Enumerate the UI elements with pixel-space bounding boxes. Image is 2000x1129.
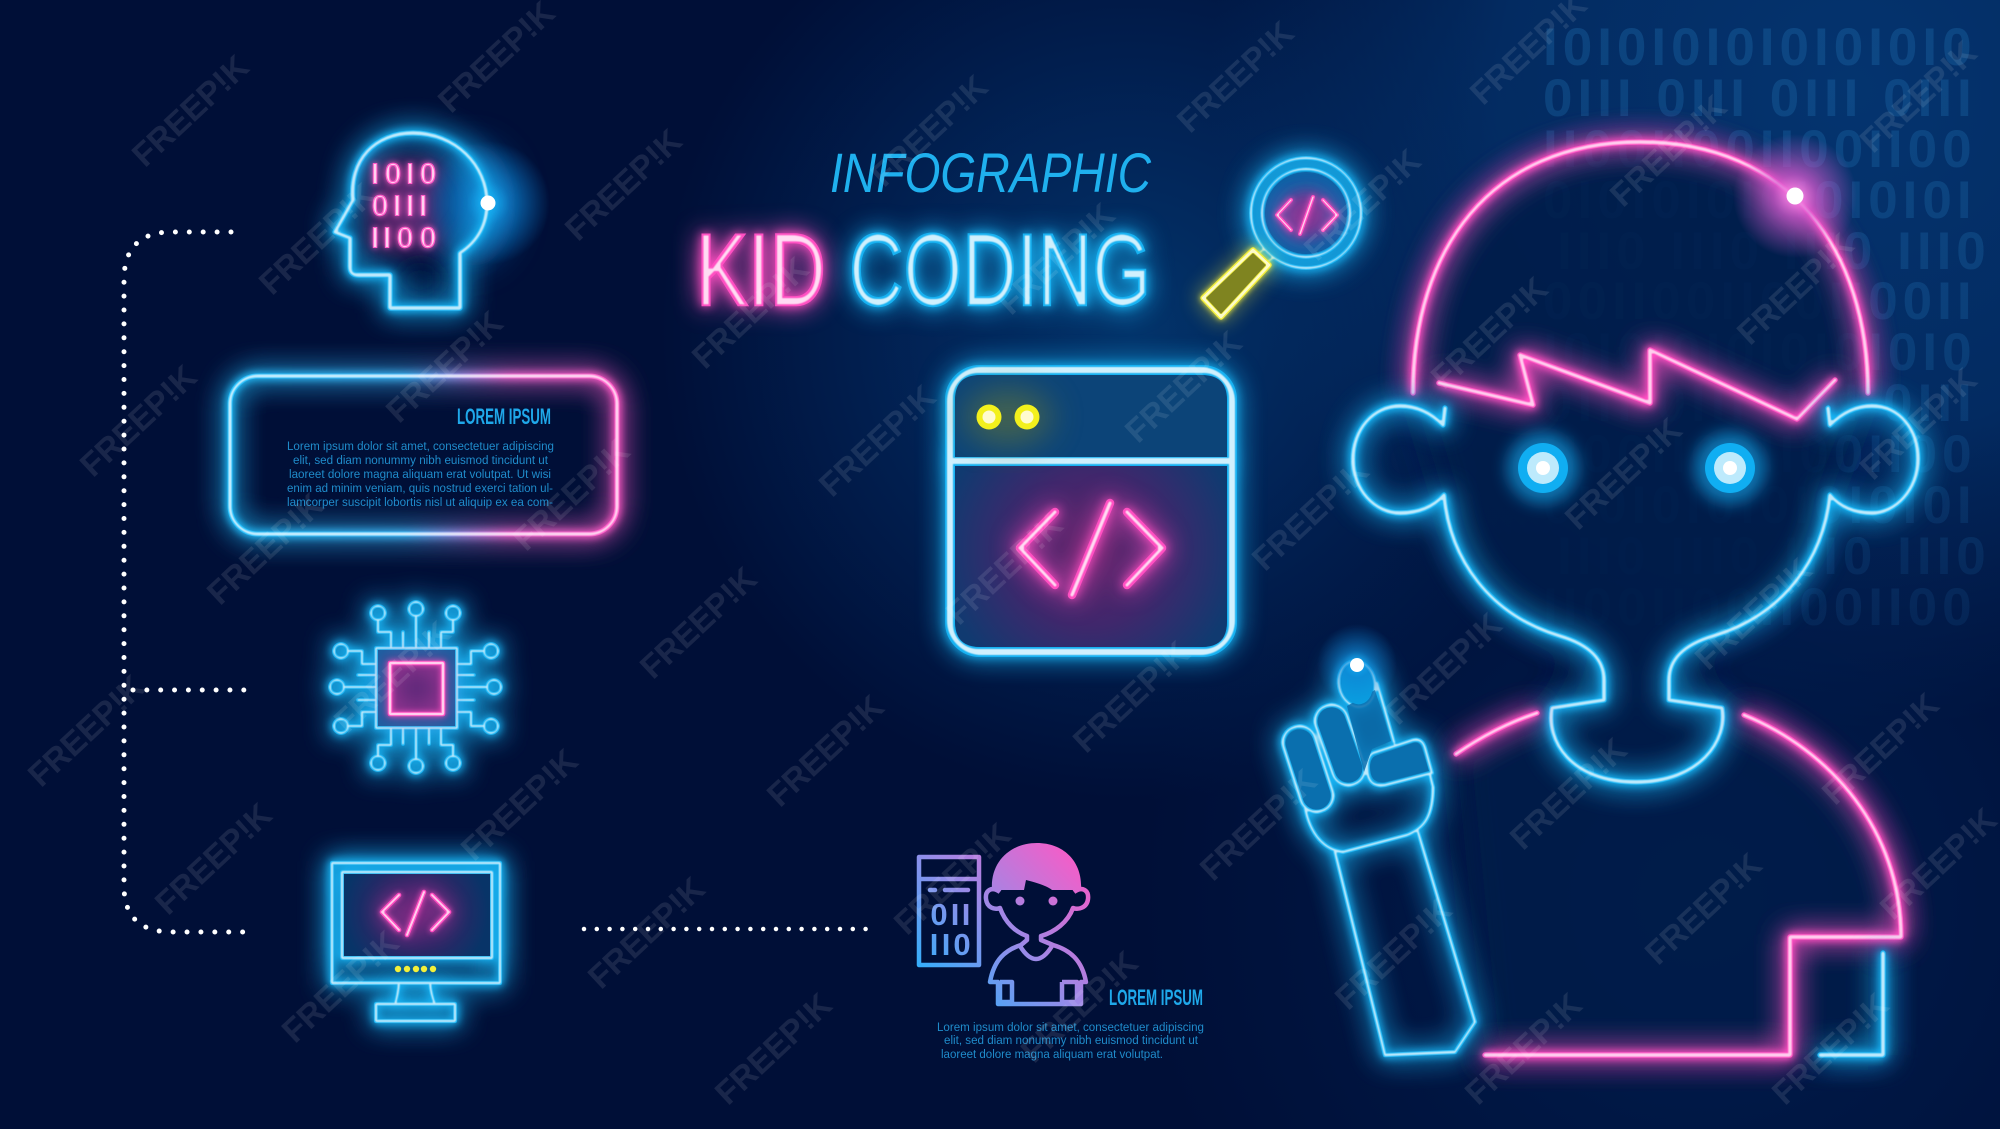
kid caption body: elit, sed diam nonummy nibh euismod tincidunt ut	[944, 1033, 1199, 1047]
watermark grid: FREEP!K	[148, 796, 279, 922]
icon: desktop monitor	[332, 863, 500, 1021]
watermark grid: FREEP!K	[581, 870, 712, 996]
kid caption heading: LOREM IPSUM	[1109, 985, 1203, 1010]
left shoulder	[1456, 713, 1537, 754]
watermark grid: FREEP!K	[864, 68, 995, 194]
watermark grid: FREEP!K	[1638, 846, 1769, 972]
watermark grid: FREEP!K	[1853, 34, 1984, 160]
watermark grid: FREEP!K	[73, 358, 204, 484]
panel body text: laoreet dolore magna aliquam erat volutpat. Ut wisi	[289, 467, 551, 481]
binary code background pattern: 0III 0III 0III 0III	[1543, 69, 1977, 128]
watermark grid: FREEP!K	[1170, 14, 1301, 140]
eye: left	[1507, 432, 1579, 504]
watermark grid: FREEP!K	[812, 378, 943, 504]
watermark grid: FREEP!K	[275, 924, 406, 1050]
panel body text: enim ad minim veniam, quis nostrud exerci tation ul-	[287, 481, 553, 495]
watermark grid: FREEP!K	[1118, 324, 1249, 450]
watermark grid: FREEP!K	[454, 742, 585, 868]
icon: head with binary: I0I0	[371, 156, 437, 191]
eye: right	[1694, 432, 1766, 504]
large kid figure	[1279, 134, 1918, 1055]
watermark grid: FREEP!K	[1245, 452, 1376, 578]
icon: microchip	[330, 602, 501, 773]
raised hand and arm	[1279, 624, 1475, 1055]
watermark grid: FREEP!K	[379, 304, 510, 430]
watermark grid: FREEP!K	[327, 614, 458, 740]
watermark grid: FREEP!K	[1328, 891, 1459, 1017]
watermark grid: FREEP!K	[252, 176, 383, 302]
icon: head with binary: 0III	[371, 188, 427, 223]
head and body dark silhouette	[1413, 142, 1901, 1055]
head outline	[1413, 142, 1868, 393]
watermark grid: FREEP!K	[991, 196, 1122, 322]
watermark grid: FREEP!K	[1014, 944, 1145, 1070]
watermark grid: FREEP!K	[1730, 226, 1861, 352]
panel heading: LOREM IPSUM	[457, 404, 551, 429]
binary code background pattern: I0I0I0I0I0I0I0I0	[1543, 18, 1977, 77]
watermark grid: FREEP!K	[200, 486, 331, 612]
watermark grid: FREEP!K	[708, 986, 839, 1112]
watermark grid: FREEP!K	[1815, 686, 1946, 812]
watermark grid: FREEP!K	[1424, 270, 1555, 396]
watermark grid: FREEP!K	[125, 48, 256, 174]
hair fringe	[1439, 350, 1835, 419]
kid caption body: laoreet dolore magna aliquam erat volutpat.	[941, 1047, 1163, 1061]
watermark grid: FREEP!K	[1503, 731, 1634, 857]
binary code background pattern: II00II00II00II00	[1543, 120, 1977, 179]
binary code background pattern: 00II00II00II00II	[1543, 272, 1977, 331]
watermark grid: FREEP!K	[558, 122, 689, 248]
dotted connector: to kid icon	[584, 927, 866, 931]
watermark grid: FREEP!K	[1603, 88, 1734, 214]
binary code background pattern	[1543, 18, 1991, 637]
watermark grid: FREEP!K	[1297, 142, 1428, 268]
icon: head with binary: II00	[371, 220, 437, 255]
watermark grid: FREEP!K	[1688, 551, 1819, 677]
dotted connector: left bracket	[124, 232, 244, 932]
icon: small kid with calculator: II0	[930, 927, 971, 962]
icon: magnifying glass	[1203, 158, 1361, 317]
binary code background pattern: II00II00II00II00	[1543, 425, 1977, 484]
binary code background pattern: I0I0I0I0I0I0I0I0	[1543, 323, 1977, 382]
right shoulder and torso	[1485, 715, 1901, 1055]
watermark grid: FREEP!K	[1193, 762, 1324, 888]
binary code background pattern: III0 III0 III0 III0	[1557, 222, 1991, 281]
title: kid: KID	[696, 213, 826, 327]
panel body text: lamcorper suscipit lobortis nisl ut aliquip ex ea com-	[287, 495, 553, 509]
icon: code window	[950, 370, 1232, 652]
watermark grid: FREEP!K	[21, 668, 152, 794]
watermark grid: FREEP!K	[1853, 361, 1984, 487]
watermark grid: FREEP!K	[1458, 986, 1589, 1112]
watermark grid: FREEP!K	[1873, 801, 2000, 927]
icon: small kid with calculator	[919, 843, 1088, 1004]
kid caption body	[937, 1020, 1204, 1061]
panel body text	[287, 439, 554, 509]
watermark grid: FREEP!K	[1066, 634, 1197, 760]
binary code background pattern: 0III 0III 0III 0III	[1543, 374, 1977, 433]
binary code background pattern: II00II00II00II00	[1543, 578, 1977, 637]
binary code background pattern: III0 III0 III0 III0	[1557, 527, 1991, 586]
binary code background pattern: 0I0I0I0I0I0I0I0I	[1543, 171, 1977, 230]
watermark grid: FREEP!K	[1765, 986, 1896, 1112]
dotted connector: middle branch	[133, 688, 244, 692]
watermark grid: FREEP!K	[939, 506, 1070, 632]
icon: small kid with calculator: 0II	[930, 897, 970, 932]
watermark grid: FREEP!K	[506, 432, 637, 558]
watermark grid: FREEP!K	[633, 560, 764, 686]
watermark grid: FREEP!K	[1378, 606, 1509, 732]
watermark grid: FREEP!K	[887, 816, 1018, 942]
kid caption body: Lorem ipsum dolor sit amet, consectetuer adipiscing	[937, 1020, 1204, 1034]
title: infographic: INFOGRAPHIC	[830, 141, 1151, 204]
watermark grid: FREEP!K	[760, 688, 891, 814]
face, ears and collar outline	[1353, 406, 1918, 782]
binary code background pattern: 0I0I0I0I0I0I0I0I	[1543, 476, 1977, 535]
right sleeve	[1820, 953, 1883, 1055]
panel body text: elit, sed diam nonummy nibh euismod tincidunt ut	[293, 453, 549, 467]
watermark grid: FREEP!K	[685, 250, 816, 376]
watermark grid: FREEP!K	[1558, 411, 1689, 537]
head highlight spark	[1733, 134, 1857, 258]
panel body text: Lorem ipsum dolor sit amet, consectetuer adipiscing	[287, 439, 554, 453]
title: coding: CODING	[849, 213, 1151, 327]
icon: head with binary	[335, 133, 550, 308]
panel: lorem ipsum box	[230, 376, 617, 534]
